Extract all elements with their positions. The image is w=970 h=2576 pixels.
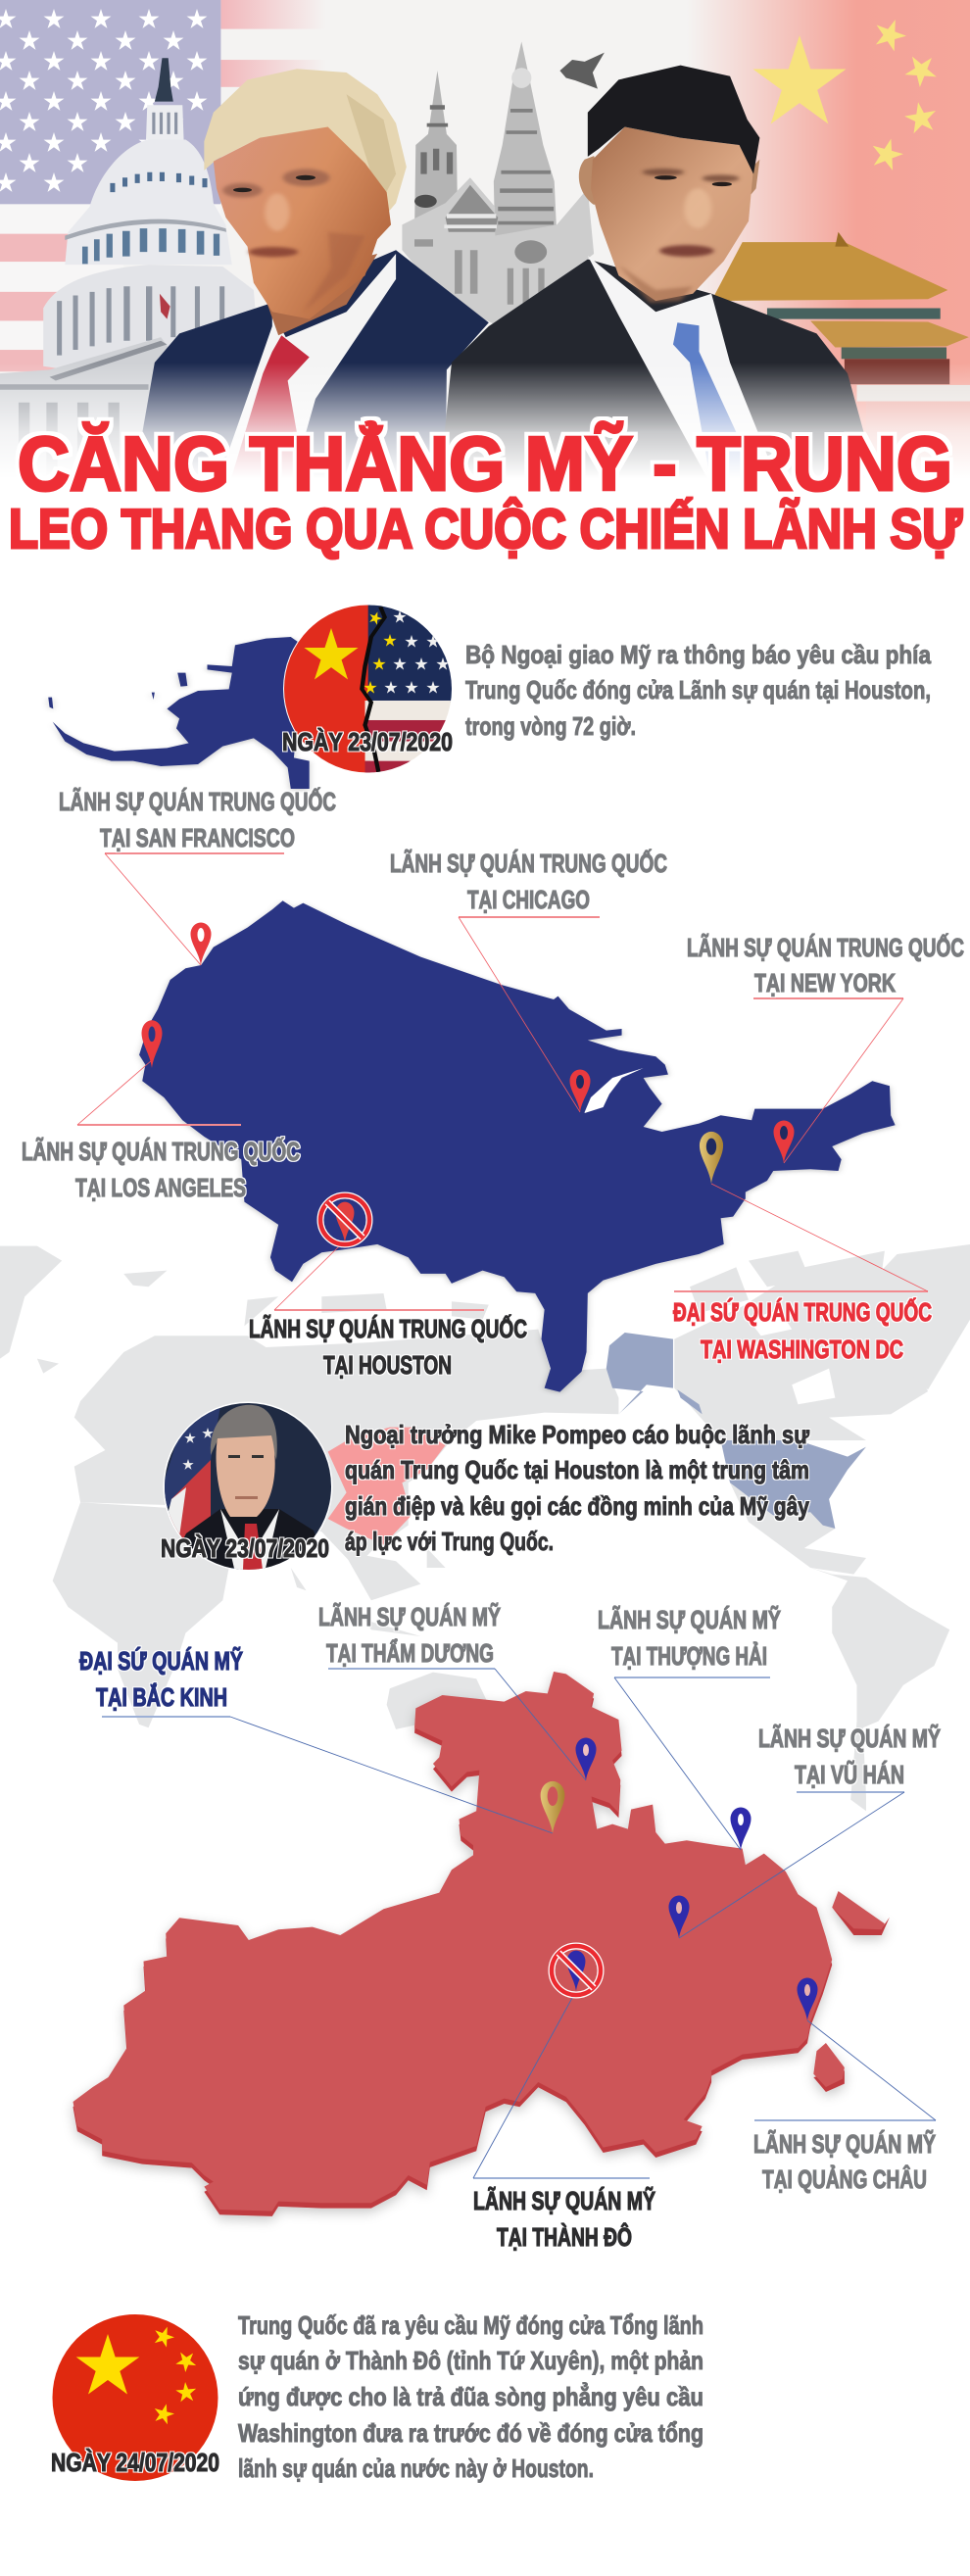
label: Chicago: LÃNH SỰ QUÁN TRUNG QUỐC [390,849,667,878]
label: Chicago [390,849,667,914]
Forbidden City palace [711,232,970,486]
circle: China and US cracked flag [282,604,455,775]
label: Chengdu: LÃNH SỰ QUÁN MỸ [473,2186,655,2215]
icon: US flag stars [0,9,207,192]
callout lines: China [102,1669,936,2178]
text block: China response [238,2310,703,2483]
text block: China response: ứng được cho là trả đũa sòng phẳng yêu cầu [238,2381,703,2411]
icon: pin Shenyang [576,1738,596,1780]
label: Beijing: TẠI BẮC KINH [96,1682,227,1712]
icon: China flag stars [752,14,944,171]
title [9,420,963,560]
icon: gold pin Beijing [541,1781,564,1833]
icon: closed pin Houston [320,1195,369,1244]
label: Guangzhou [753,2129,936,2194]
panel: map of USA [48,637,896,1392]
label: Washington DC [673,1297,932,1364]
Capitol building [0,58,260,486]
world map: China highlight [328,1428,446,1545]
icon: pin Guangzhou [798,1977,817,2020]
text block: US State Department: trong vòng 72 giờ. [465,711,636,741]
date label 24/07: NGÀY 24/07/2020 [51,2448,219,2477]
icon: bird [559,53,605,89]
Kremlin towers [402,42,594,324]
label: Los Angeles: TẠI LOS ANGELES [75,1173,246,1202]
label: Shenyang: LÃNH SỰ QUÁN MỸ [318,1602,501,1631]
label: Houston: TẠI HOUSTON [323,1350,452,1380]
text block: Pompeo accusation: gián điệp và kêu gọi các đồng minh của Mỹ gây [345,1491,809,1521]
text block: Pompeo accusation: quán Trung Quốc tại Houston là một trung tâm [345,1455,809,1484]
label: Los Angeles [22,1137,300,1202]
label: Houston: LÃNH SỰ QUÁN TRUNG QUỐC [249,1314,527,1343]
text block: China response: lãnh sự quán của nước này ở Houston. [238,2454,594,2483]
date label 23/07 Pompeo: NGÀY 23/07/2020 [161,1533,329,1563]
text block: US State Department [465,640,931,741]
icon: China flag circle [53,2314,218,2481]
label: Chengdu: TẠI THÀNH ĐÔ [497,2222,632,2252]
label: Shanghai: TẠI THƯỢNG HẢI [611,1641,767,1671]
portrait: Mike Pompeo [162,1401,338,1573]
hero banner [0,0,970,557]
icon: pin Wuhan [668,1895,690,1938]
text block: China response: sự quán ở Thành Đô (tỉnh Tứ Xuyên), một phản [238,2346,703,2375]
icon: pin Chicago [570,1070,590,1112]
icon: gold pin Washington [700,1132,723,1184]
Trump portrait [133,69,489,486]
text block: Pompeo accusation: Ngoại trưởng Mike Pompeo cáo buộc lãnh sự [345,1420,809,1449]
label: New York: TẠI NEW YORK [754,968,896,997]
label: Washington DC: TẠI WASHINGTON DC [701,1335,903,1364]
label: Wuhan: TẠI VŨ HÁN [795,1760,904,1789]
label: Wuhan [758,1724,941,1789]
label: San Francisco [59,787,336,852]
label: Chicago: TẠI CHICAGO [467,885,590,914]
world map: Alaska and USA highlight [606,1333,866,1529]
text block: China response: Washington đưa ra trước đó về đóng cửa tổng [238,2418,703,2448]
icon: pin Shanghai [731,1807,751,1850]
text block: China response: Trung Quốc đã ra yêu cầu Mỹ đóng cửa Tổng lãnh [238,2310,703,2340]
Alaska map [48,637,310,789]
label: New York [687,933,964,997]
label: San Francisco: LÃNH SỰ QUÁN TRUNG QUỐC [59,787,336,816]
Xi portrait [439,66,879,486]
date label 23/07: NGÀY 23/07/2020 [282,727,453,756]
text block: Pompeo accusation: áp lực với Trung Quốc. [345,1527,554,1556]
label: Shanghai [598,1605,781,1671]
label: San Francisco: TẠI SAN FRANCISCO [100,823,295,852]
icon: pin New York [774,1121,794,1163]
label: Shanghai: LÃNH SỰ QUÁN MỸ [598,1605,781,1634]
world map background [0,1244,970,1811]
label: Chengdu [473,2186,655,2252]
panel: map of China [73,1672,890,2216]
icon: closed pin Chengdu [552,1946,601,1995]
label: Shenyang: TẠI THẨM DƯƠNG [326,1638,494,1668]
label: Beijing: ĐẠI SỨ QUÁN MỸ [79,1646,243,1676]
icon: pin San Francisco [190,923,212,965]
label: Houston [249,1314,527,1380]
contiguous United States map [139,900,896,1392]
label: Los Angeles: LÃNH SỰ QUÁN TRUNG QUỐC [22,1137,300,1166]
icon: pin Los Angeles [141,1020,163,1068]
callout lines: USA [77,853,928,1310]
text block: Pompeo accusation [345,1420,809,1556]
label: Beijing [79,1646,243,1712]
label: Shenyang [318,1602,501,1668]
